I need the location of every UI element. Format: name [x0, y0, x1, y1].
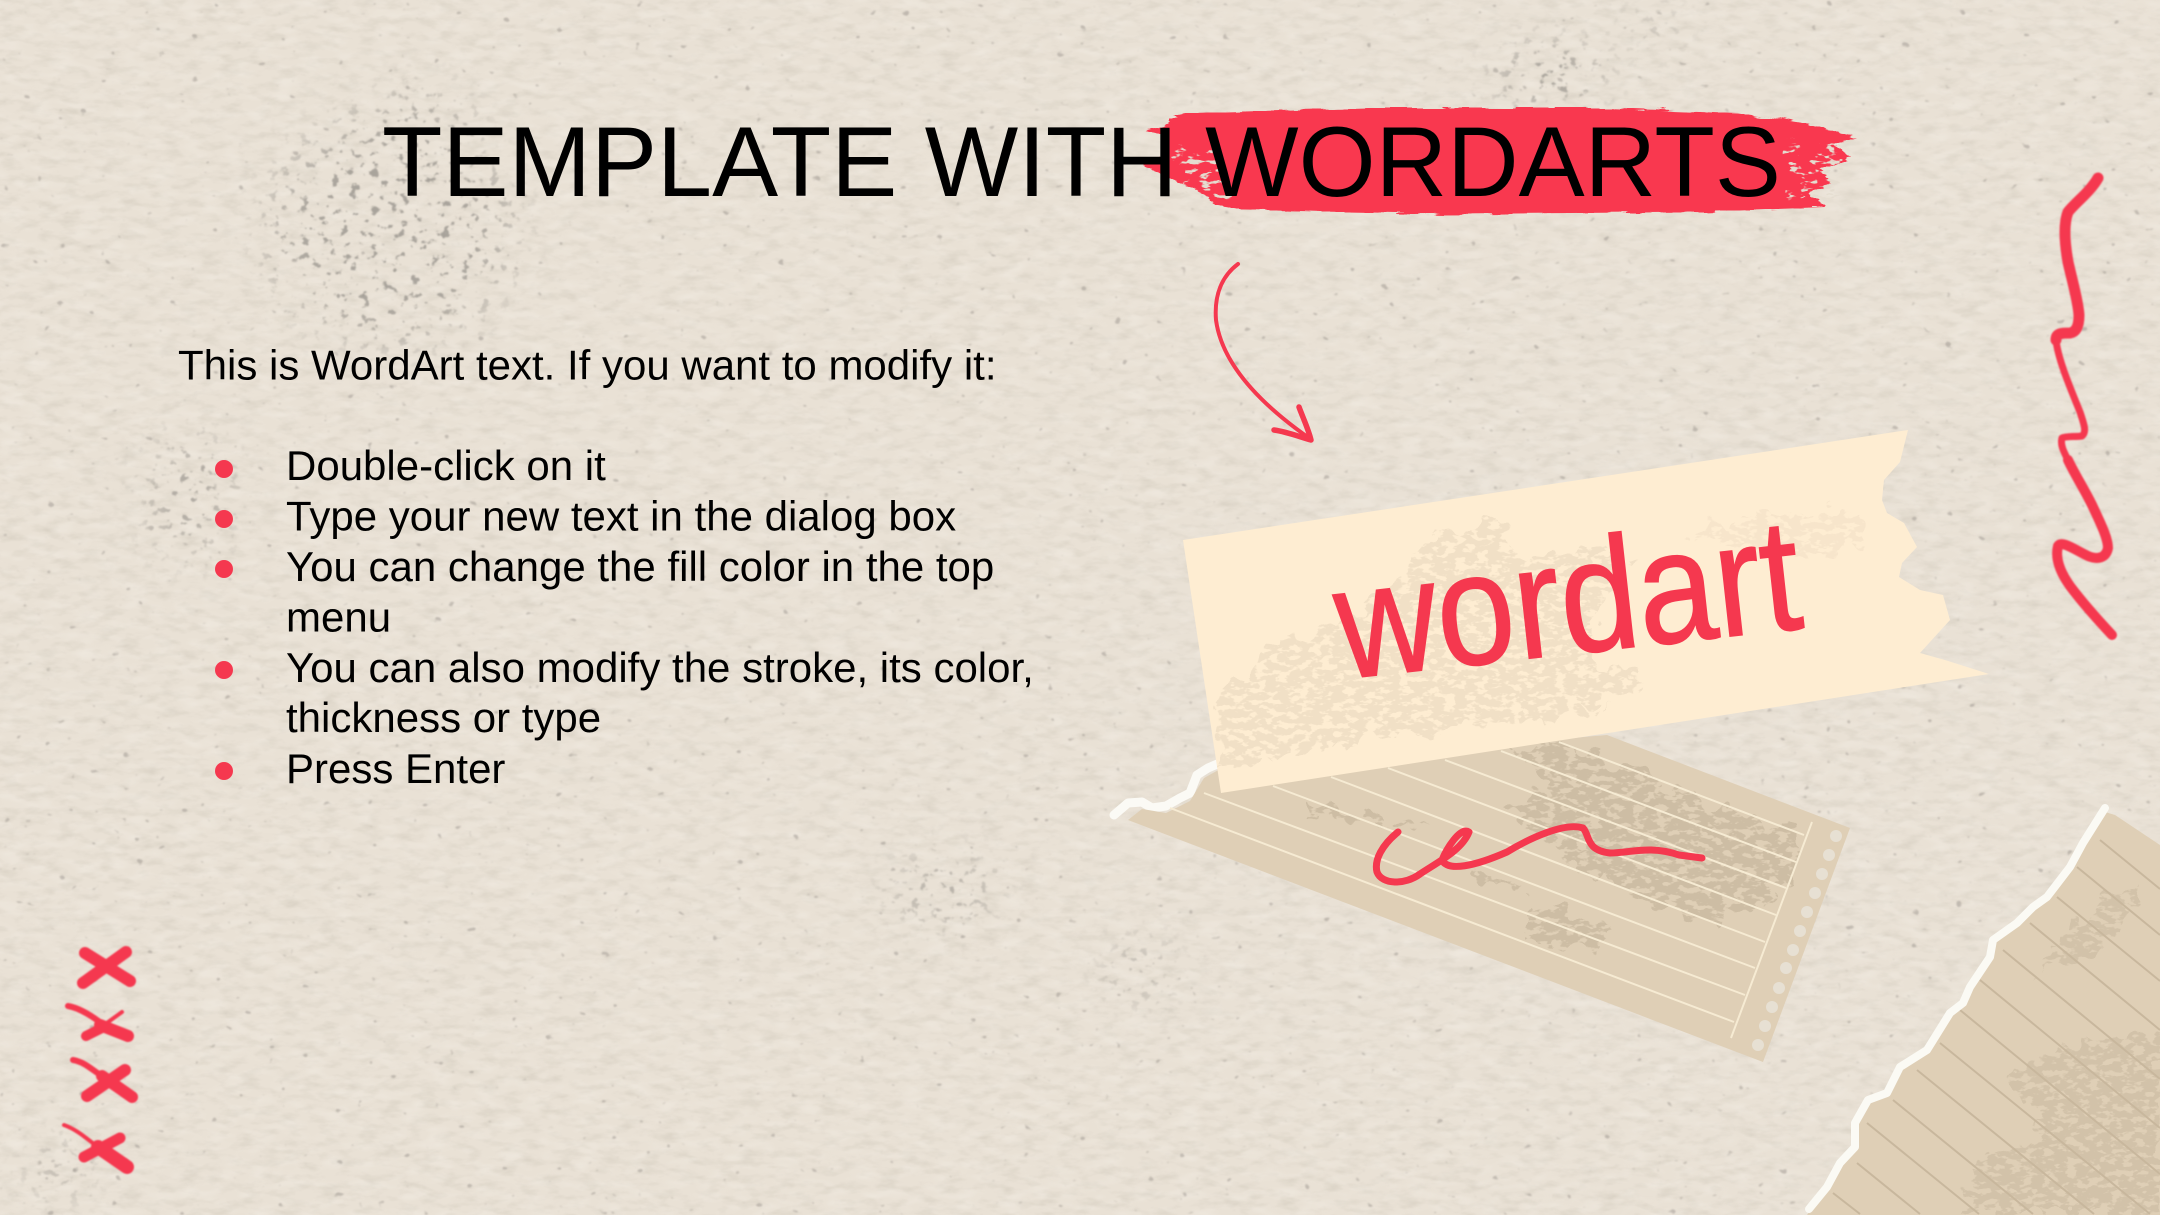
dry brush gaps — [1170, 140, 1850, 200]
bullet item 4: You can also modify the stroke, its color, — [286, 644, 1034, 691]
paper sheet — [1128, 735, 1850, 1062]
bullet item 2: Type your new text in the dialog box — [286, 492, 956, 540]
lined note paper — [1114, 735, 1850, 1062]
bullet item 1: Double-click on it — [286, 442, 606, 489]
curved arrow — [1216, 264, 1311, 440]
bullet item 4 — [215, 644, 1034, 741]
red cross marks — [64, 952, 132, 1167]
corner ruled lines — [1833, 840, 2160, 1214]
cross 3 — [73, 1060, 132, 1097]
punched holes — [1752, 830, 1842, 1051]
wordart word: wordart — [1325, 484, 1809, 713]
bullet item 3: menu — [286, 594, 391, 640]
red scribble on note paper — [1376, 827, 1702, 882]
bullet item 5: Press Enter — [286, 745, 505, 792]
torn white edge — [1114, 762, 1222, 815]
tape strip — [1183, 430, 1989, 793]
intro text: This is WordArt text. If you want to modify it: — [178, 342, 996, 388]
torn white edge — [1809, 808, 2105, 1209]
bullet item 4: thickness or type — [286, 694, 601, 741]
brush body — [1142, 108, 1857, 214]
torn lined paper corner — [1807, 808, 2160, 1215]
title: TEMPLATE WITH WORDARTS — [382, 106, 1781, 217]
masking tape — [1183, 430, 1989, 793]
tape stains — [1216, 510, 1865, 767]
cross 1 — [83, 952, 130, 983]
cross 2 — [68, 1006, 128, 1036]
red brush stroke behind WORDARTS — [1142, 108, 1857, 214]
cross 4 — [64, 1125, 127, 1167]
bullet item 3: You can change the fill color in the top — [286, 543, 994, 590]
paper stains — [1300, 743, 1796, 950]
corner stains — [1960, 884, 2160, 1215]
ruled lines — [1170, 742, 1812, 1038]
bullet list — [215, 442, 1034, 792]
bullet item 3 — [215, 543, 994, 640]
red wavy scribble right — [2056, 178, 2112, 635]
corner sheet — [1807, 812, 2160, 1215]
